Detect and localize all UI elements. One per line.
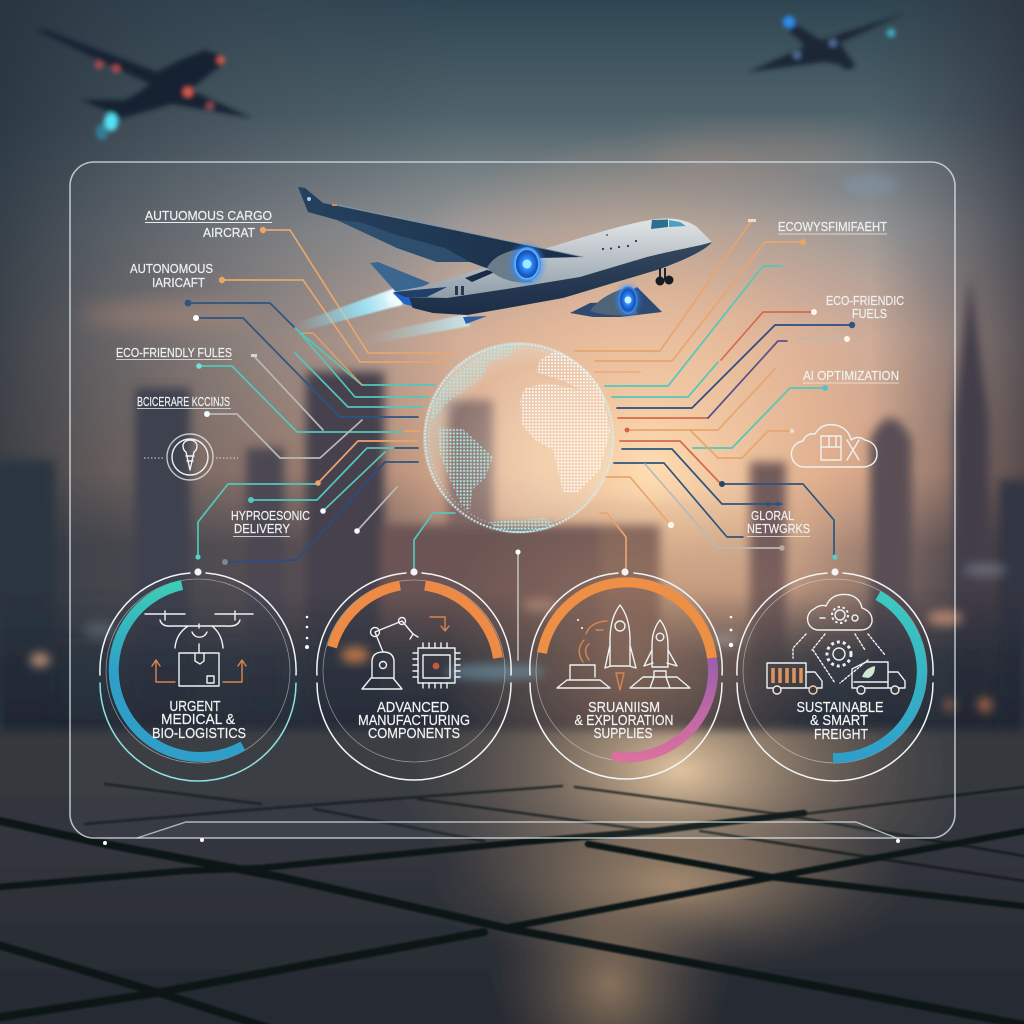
icon: cloud with door and tools	[791, 425, 877, 467]
label: eco-friendly fuels right: ECO-FRIENDIC	[826, 293, 904, 308]
label: autonomous aircraft: AUTONOMOUS	[130, 261, 213, 276]
label: hypersonic delivery	[231, 508, 310, 536]
panel: space exploration supplies: & EXPLORATION	[574, 713, 674, 729]
globe: North America fragment	[432, 345, 520, 420]
cockpit windows	[651, 220, 668, 229]
main wing	[298, 187, 583, 275]
globe: Americas landmass	[437, 427, 493, 512]
icon: round cone badge	[144, 434, 238, 480]
left connector nodes	[185, 227, 521, 565]
circle text: SRUANIISM	[588, 700, 660, 716]
label: global networks	[747, 508, 810, 536]
small blurred plane, top right	[748, 13, 905, 72]
circle text: SUSTAINABLE	[796, 700, 884, 716]
panel: advanced manufacturing: COMPONENTS	[368, 726, 460, 742]
vertical tail	[370, 262, 430, 292]
icon: robot arm and chip	[362, 617, 460, 689]
exhaust trails	[295, 287, 402, 333]
panel: sustainable smart freight	[737, 568, 933, 781]
tail stabilizer	[393, 287, 447, 297]
background: blurred city skyline	[0, 275, 1024, 740]
progress arc: orange	[542, 582, 712, 658]
outer ring	[737, 573, 933, 781]
outer ring	[100, 573, 296, 781]
panel: advanced manufacturing: MANUFACTURING	[358, 713, 470, 729]
panel: sustainable smart freight: & SMART	[810, 713, 868, 729]
near engine	[487, 248, 532, 282]
cabin windows	[455, 234, 637, 295]
panel: space exploration supplies	[530, 568, 722, 779]
label: autonomous aircraft	[130, 261, 213, 290]
glass panel	[70, 162, 955, 845]
label: autonomous aircraft: IARICAFT	[152, 275, 205, 290]
label: global networks: GLORAL	[751, 508, 794, 523]
fuselage belly	[405, 242, 712, 315]
panel: urgent medical: BIO-LOGISTICS	[152, 726, 246, 742]
engine blue nozzle	[393, 291, 412, 306]
dotted holographic globe	[423, 342, 615, 536]
background: city bokeh lights	[30, 563, 1007, 712]
dots between circles 3 and 4	[729, 616, 733, 647]
background: dusk sky	[0, 0, 1024, 760]
label: global networks: NETWGRKS	[747, 521, 810, 536]
icon: cloud, gears and trucks	[767, 594, 905, 694]
panel: urgent medical: MEDICAL &	[161, 712, 235, 728]
label: autonomous cargo aircraft: AIRCRAT	[203, 225, 255, 240]
panel: urgent medical	[100, 568, 296, 781]
label: hypersonic delivery: DELIVERY	[234, 521, 290, 536]
label: autonomous cargo aircraft	[145, 208, 272, 240]
outer ring	[530, 573, 722, 779]
small blurred plane, top left	[36, 30, 252, 140]
outer ring	[317, 573, 511, 780]
landing gear	[660, 268, 665, 280]
right circuit connector lines	[575, 220, 852, 568]
label: ecosystem freight: ECOWYSFIMIFAEHT	[778, 219, 887, 234]
label: eco-friendly fuels left: ECO-FRIENDLY FULES	[116, 345, 232, 360]
far wing and engine	[570, 287, 662, 317]
label: autonomous cargo aircraft: AUTUOMOUS CARGO	[145, 208, 272, 223]
label: eco-friendly fuels right: FUELS	[852, 306, 887, 321]
progress arc: purple to pink	[612, 658, 713, 757]
dots between circles 1 and 2	[305, 616, 309, 649]
progress arc	[114, 585, 243, 757]
label: hypersonic delivery: HYPROESONIC	[231, 508, 310, 523]
icon: rockets and launch pads	[557, 605, 690, 690]
panel: sustainable smart freight: FREIGHT	[814, 727, 868, 743]
fuselage	[393, 218, 712, 315]
globe: polar cap	[490, 518, 555, 533]
globe: Africa and Eurasia landmass	[520, 350, 610, 493]
progress arc	[833, 596, 922, 758]
label: eco-friendly fuels right	[826, 293, 904, 321]
hero aircraft	[295, 187, 712, 344]
progress arcs	[332, 586, 400, 647]
panel: advanced manufacturing	[317, 568, 511, 780]
label: garbled left item: BCICERARE KCCINJS	[137, 394, 230, 409]
circle text: ADVANCED	[377, 700, 449, 716]
icon: drone with parcel	[145, 611, 253, 686]
panel: space exploration supplies: SUPPLIES	[594, 726, 652, 742]
right connector nodes	[625, 219, 855, 560]
pylon	[465, 270, 495, 282]
left circuit connector lines	[188, 230, 518, 660]
label: ai optimization: AI OPTIMIZATION	[803, 368, 899, 383]
background: tiled floor	[0, 730, 1024, 1024]
circle text: URGENT	[170, 699, 221, 715]
label: garbled left item	[137, 394, 231, 409]
